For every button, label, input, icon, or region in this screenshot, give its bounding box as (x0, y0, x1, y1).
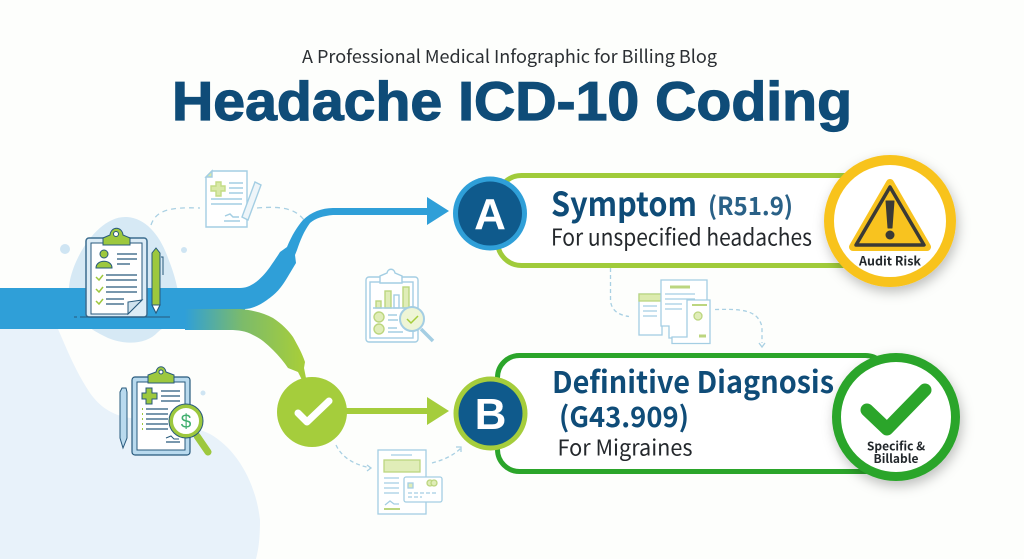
arrowheads (367, 447, 461, 471)
badge B (454, 376, 528, 450)
icon: check node (277, 377, 347, 447)
label: Specific & (867, 438, 925, 454)
dashed connector: top (151, 207, 304, 225)
specific and billable callout: Billable (874, 450, 919, 467)
description B: For Migraines (558, 430, 692, 462)
arrow A (333, 197, 449, 225)
panel B (498, 356, 888, 472)
icon: prescription document (206, 171, 261, 227)
label: Audit Risk (858, 250, 921, 270)
code A: (R51.9) (708, 187, 793, 223)
icon: pen (152, 248, 163, 313)
badge B: B (475, 390, 506, 439)
code B: (G43.909) (559, 396, 689, 436)
icon: warning triangle (853, 183, 927, 247)
dots (60, 244, 206, 396)
background blob (0, 329, 260, 559)
icon: check mark (867, 390, 925, 429)
dashed connectors: bottom (336, 445, 461, 468)
icon: chart clipboard (366, 269, 433, 342)
description A: For unspecified headaches (551, 218, 812, 252)
dollar sign: $ (181, 412, 192, 433)
arrow B (346, 397, 449, 425)
subtitle: A Professional Medical Infographic for Billing Blog (302, 43, 717, 69)
icon: documents stack (639, 280, 710, 344)
icon: main clipboard (74, 228, 171, 317)
title: Headache ICD-10 Coding (172, 70, 852, 132)
icon: pen (120, 388, 127, 448)
audit risk callout (829, 160, 951, 282)
icon: invoice and card (378, 450, 442, 514)
icon: billing clipboard (120, 367, 208, 455)
specific and billable callout (836, 358, 956, 476)
main blue band with upper branch (0, 197, 449, 329)
arrowhead (759, 343, 765, 347)
heading A: Symptom (551, 178, 697, 226)
icon: dashed flow around documents (610, 268, 762, 343)
badge A (453, 176, 527, 250)
panel A (498, 176, 882, 266)
badge A: A (474, 190, 506, 239)
green branch (185, 309, 306, 380)
heading B: Definitive Diagnosis (552, 358, 834, 402)
icon: blob behind clipboard (69, 217, 179, 343)
